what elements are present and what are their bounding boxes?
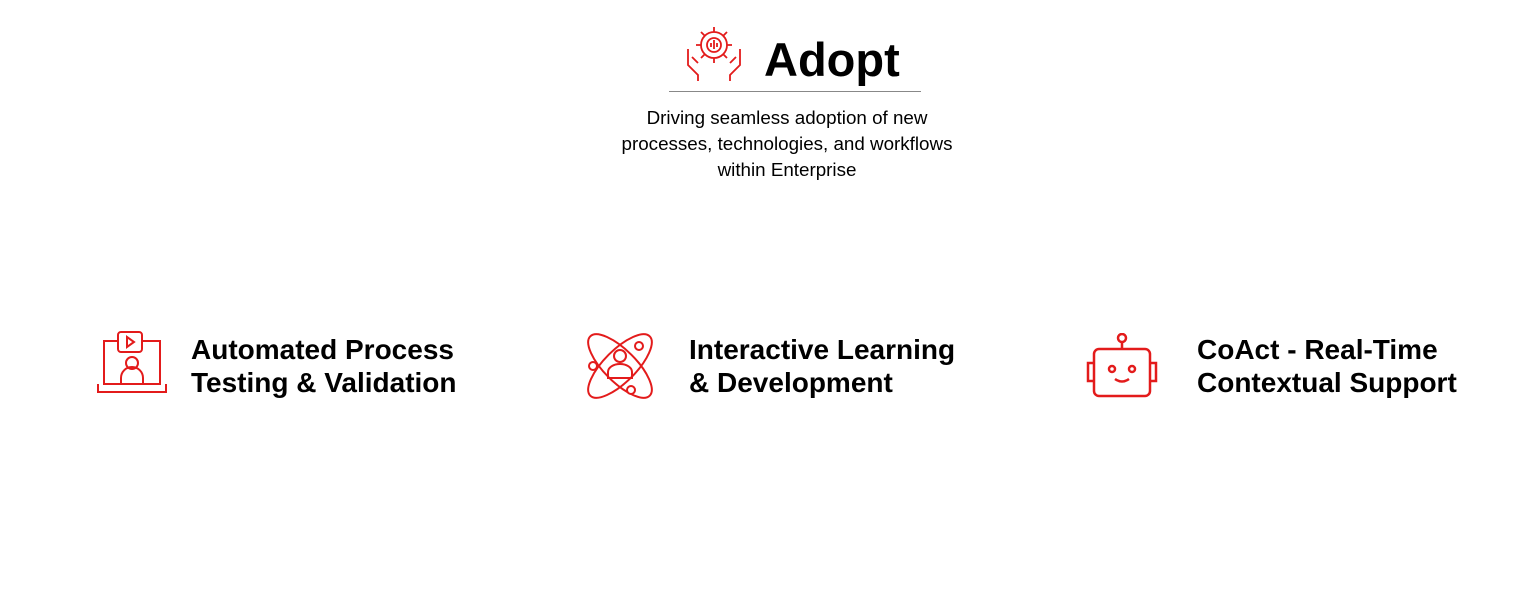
description: Driving seamless adoption of new — [647, 107, 927, 128]
heading: interactive learning: Interactive Learning — [689, 334, 955, 365]
icon: gear with hands — [687, 27, 741, 81]
heading: coact: CoAct - Real-Time — [1197, 334, 1438, 365]
description: processes, technologies, and workflows — [622, 133, 952, 154]
heading: interactive learning: & Development — [689, 367, 893, 398]
heading: automated process: Automated Process — [191, 334, 454, 365]
icon: robot — [1086, 333, 1158, 398]
heading: coact: Contextual Support — [1197, 367, 1457, 398]
heading: automated process — [191, 334, 457, 398]
heading: coact — [1197, 334, 1457, 398]
description: within Enterprise — [718, 159, 856, 180]
icon: atom learner — [587, 333, 653, 399]
title: Adopt — [764, 33, 900, 86]
heading: interactive learning — [689, 334, 955, 398]
heading: automated process: Testing & Validation — [191, 367, 457, 398]
icon: laptop video — [97, 331, 167, 393]
description — [622, 107, 952, 180]
